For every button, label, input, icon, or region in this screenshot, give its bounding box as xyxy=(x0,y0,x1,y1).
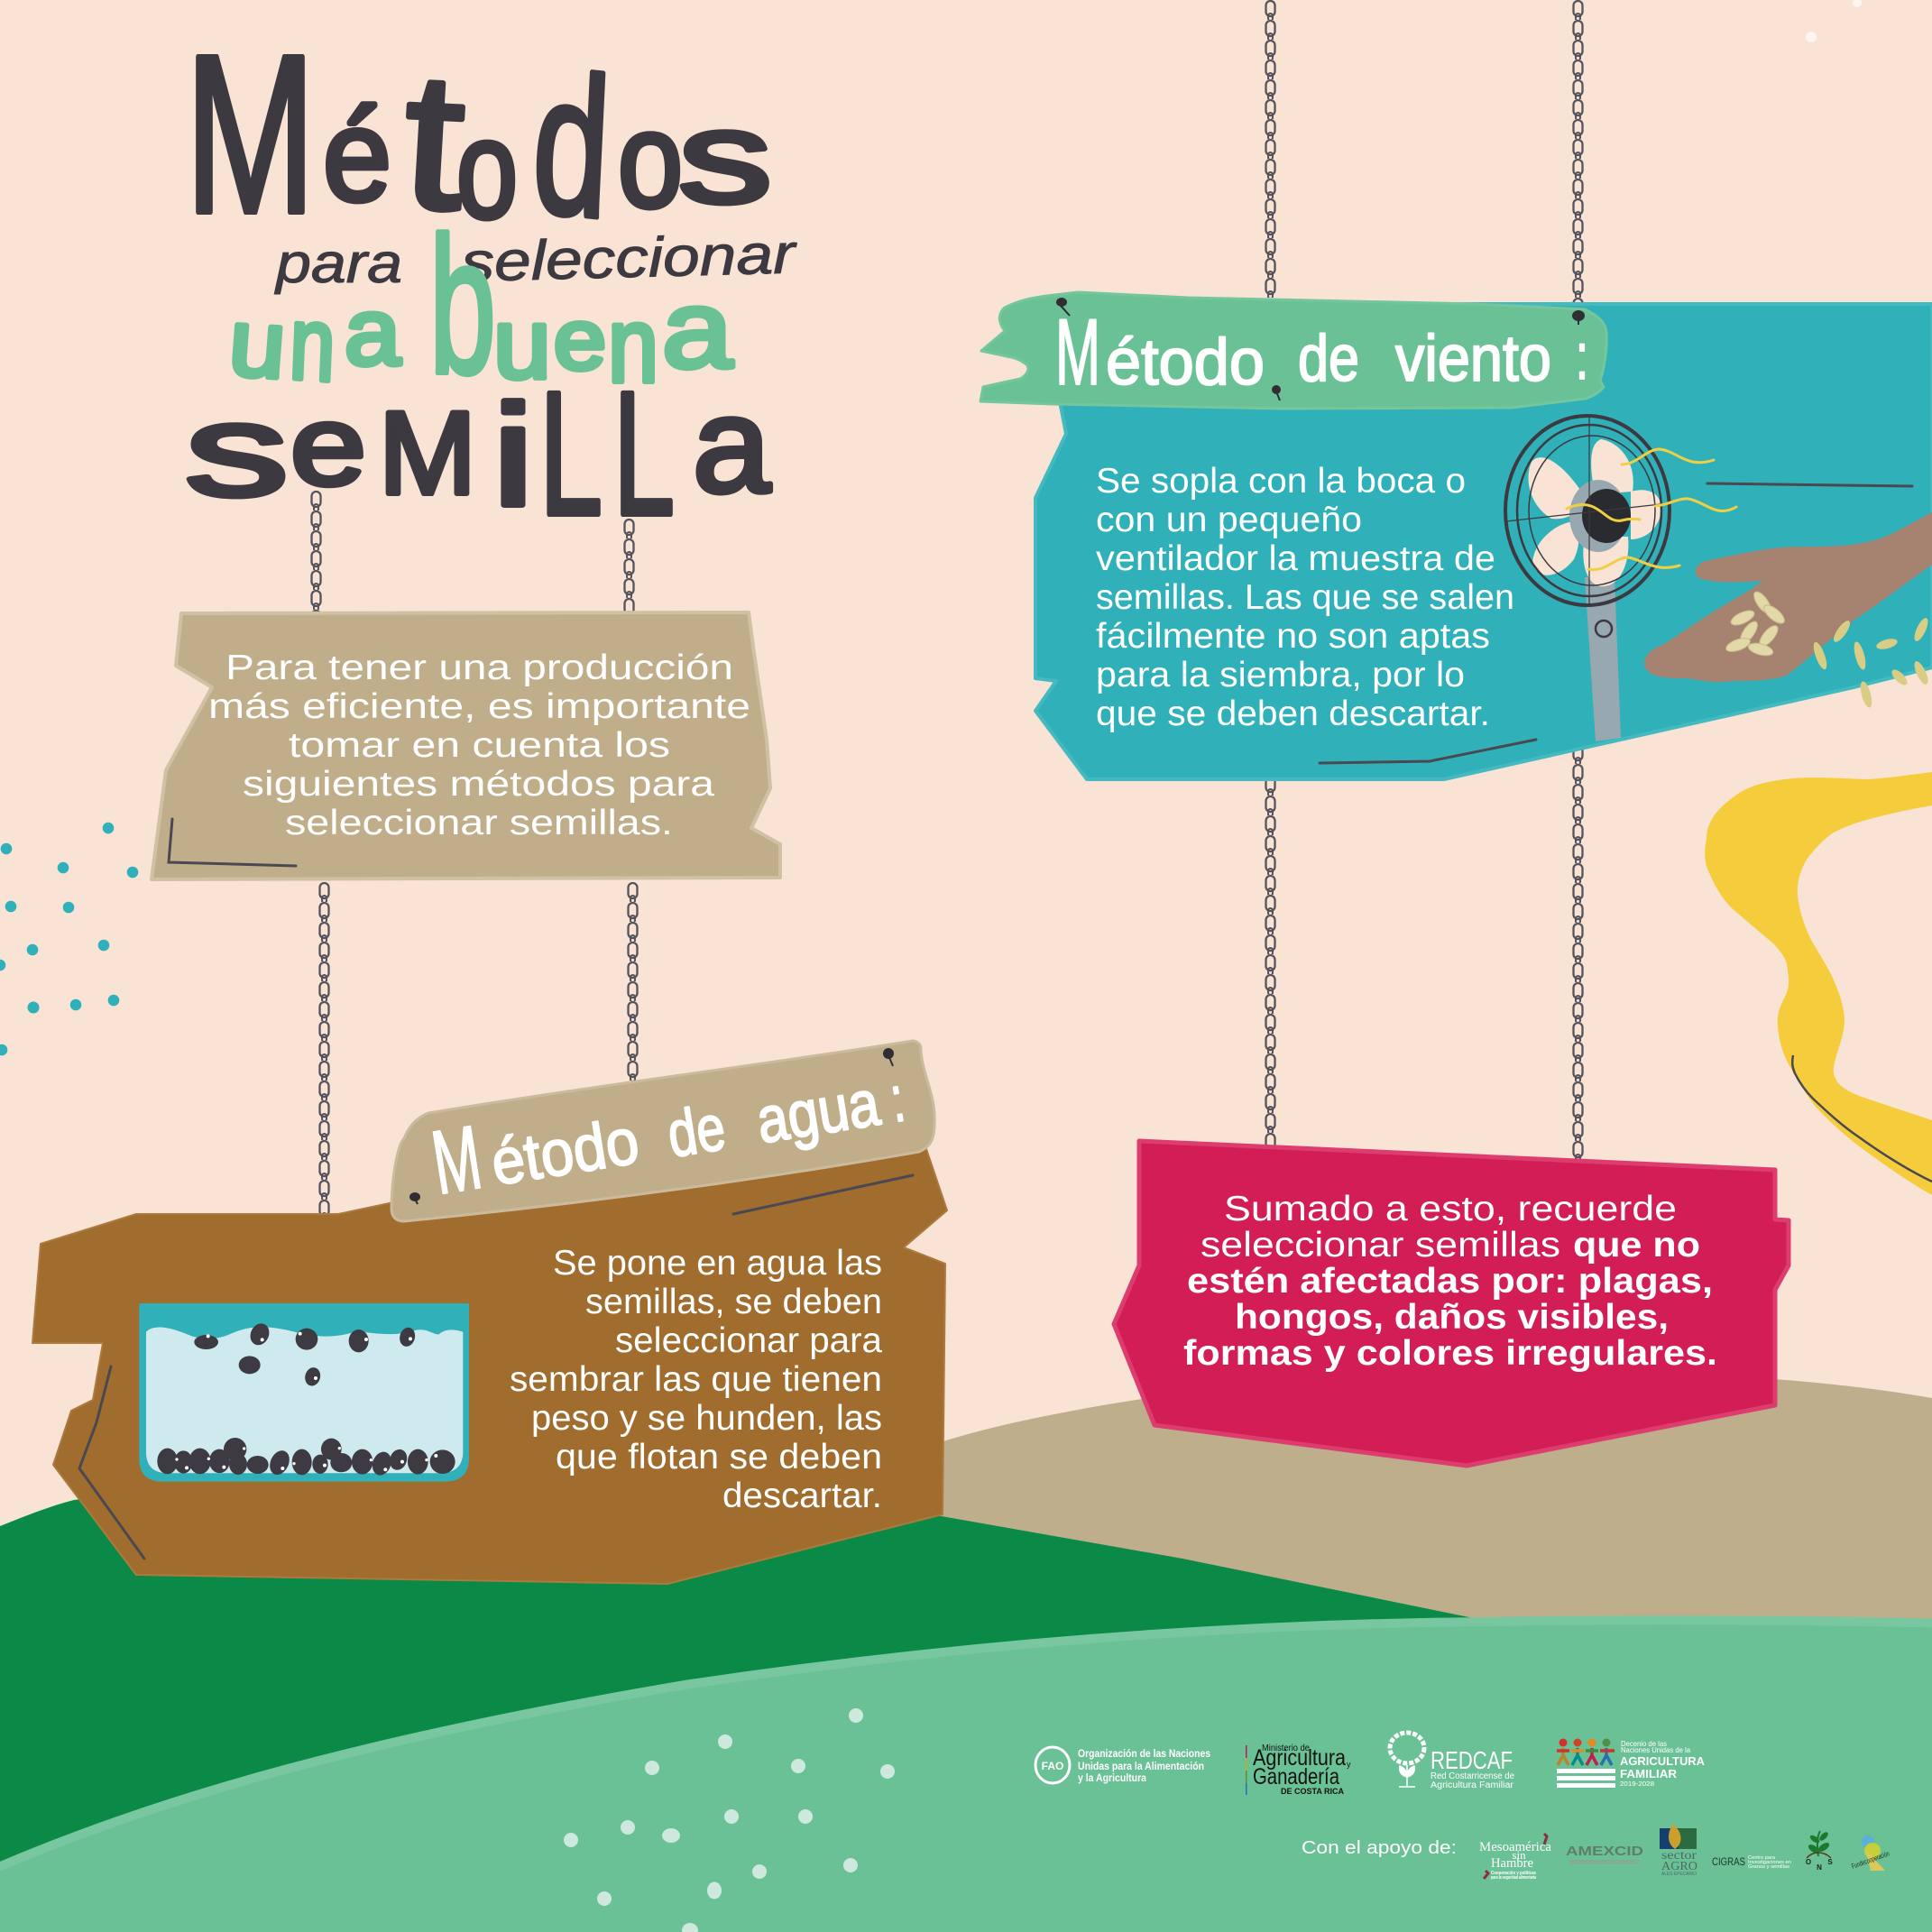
tan hill xyxy=(938,1371,1932,1669)
logo: FAO: y la Agricultura xyxy=(1078,1771,1146,1784)
logo: REDCAF xyxy=(1390,1733,1514,1790)
logo: Mesoamérica sin Hambre: Hambre xyxy=(1491,1856,1533,1871)
intro text: seleccionar semillas. xyxy=(285,804,673,842)
title line: semilla: s xyxy=(185,377,289,523)
water heading: de xyxy=(663,1091,731,1172)
intro text xyxy=(208,649,750,842)
water heading: : xyxy=(886,1063,909,1136)
logo: Decenio de la Agricultura Familiar: Naciones Unidas de la xyxy=(1621,1746,1691,1754)
logo: CIGRAS: Centro para xyxy=(1748,1855,1776,1861)
title line: buena: e xyxy=(554,292,606,388)
intro text: más eficiente, es importante xyxy=(208,687,750,726)
water body text xyxy=(510,1244,882,1515)
wind heading: étodo xyxy=(1106,327,1265,399)
wind body text: para la siembra, por lo xyxy=(1096,656,1465,695)
water body text: peso y se hunden, las xyxy=(531,1399,882,1438)
reminder text xyxy=(1183,1190,1717,1373)
icon: fan xyxy=(1505,416,1736,741)
logo: AMEXCID xyxy=(1566,1844,1643,1864)
wind heading board xyxy=(980,292,1606,409)
water heading: M xyxy=(426,1107,488,1214)
icon: nails on water heading xyxy=(409,1048,894,1204)
title line: Métodos: é xyxy=(323,82,391,228)
decorative teal dots xyxy=(0,823,138,1055)
wind heading: M xyxy=(1055,300,1100,405)
water body text: Se pone en agua las xyxy=(553,1244,882,1283)
logo: ONS xyxy=(1806,1831,1833,1872)
logo: ONS: O xyxy=(1806,1858,1811,1866)
logo: Decenio de la Agricultura Familiar xyxy=(1557,1739,1706,1788)
logo: Ministerio de Agricultura y Ganadería: Agricultura xyxy=(1253,1745,1346,1771)
logo: Decenio de la Agricultura Familiar: Decenio de las xyxy=(1621,1740,1667,1748)
wind body text: fácilmente no son aptas xyxy=(1096,617,1490,656)
support label: Con el apoyo de: xyxy=(1302,1838,1457,1858)
logo: CIGRAS: CIGRAS xyxy=(1712,1855,1745,1868)
logo: Ministerio de Agricultura y Ganadería: y xyxy=(1347,1760,1351,1769)
wind body text: Se sopla con la boca o xyxy=(1096,462,1466,501)
logo: FAO xyxy=(1035,1747,1210,1784)
water heading: agua xyxy=(752,1067,885,1157)
logo: Mesoamérica sin Hambre: para la seguridad alimentaria xyxy=(1491,1875,1536,1881)
water body text: semillas, se deben xyxy=(585,1283,882,1321)
reminder text: Sumado a esto, recuerde xyxy=(1224,1190,1677,1228)
panel: método de agua xyxy=(32,1040,947,1584)
title line: Métodos: d xyxy=(528,31,619,258)
water heading: étodo xyxy=(486,1105,644,1200)
wind body text: semillas. Las que se salen xyxy=(1096,578,1514,617)
reminder text: estén afectadas por: plagas, xyxy=(1187,1262,1713,1301)
logo: Mesoamérica sin Hambre: Cooperación y políticas xyxy=(1491,1871,1536,1876)
wind body text xyxy=(1096,462,1514,733)
logo: sector AGRO: AGRO xyxy=(1661,1860,1697,1873)
intro text: tomar en cuenta los xyxy=(289,726,670,765)
wind body text: ventilador la muestra de xyxy=(1096,539,1495,578)
wind heading: viento xyxy=(1395,323,1551,395)
title line: buena: u xyxy=(493,289,551,400)
logo: Decenio de la Agricultura Familiar: AGRICULTURA xyxy=(1620,1754,1706,1768)
panel: recordatorio xyxy=(1114,1141,1789,1466)
water heading board xyxy=(391,1041,934,1221)
wind body text: que se deben descartar. xyxy=(1096,695,1490,733)
intro board xyxy=(152,612,780,879)
red board xyxy=(1114,1141,1789,1466)
title line: seleccionar: seleccionar xyxy=(461,223,798,294)
title line: Métodos: s xyxy=(678,84,772,230)
intro text: siguientes métodos para xyxy=(243,765,714,804)
logo: Fundecooperación: Fundecooperación xyxy=(1851,1849,1891,1871)
logo: FAO: Organización de las Naciones xyxy=(1078,1747,1210,1760)
icon: hand with seeds xyxy=(1644,512,1932,709)
water body text: descartar. xyxy=(722,1477,882,1515)
title line: Métodos: o xyxy=(456,91,518,247)
logo: Mesoamérica sin Hambre: sin xyxy=(1512,1848,1526,1862)
dark green hill xyxy=(0,1479,1491,1932)
logo: Fundecooperación xyxy=(1851,1835,1891,1871)
logo: Ministerio de Agricultura y Ganadería: Ministerio de xyxy=(1262,1743,1310,1753)
water board xyxy=(32,1146,947,1584)
panel: intro xyxy=(152,612,780,879)
reminder text: hongos, daños visibles, xyxy=(1235,1298,1669,1337)
logo: sector AGRO xyxy=(1660,1824,1697,1877)
logo: CIGRAS: Granos y semillas xyxy=(1748,1864,1789,1870)
logo: CIGRAS: Investigaciones en xyxy=(1748,1860,1791,1865)
title line: semilla: L xyxy=(539,355,603,552)
title line: buena: b xyxy=(429,197,496,414)
reminder text: que no xyxy=(1573,1226,1700,1265)
decorative white dots top right xyxy=(1806,0,1862,42)
logo: Decenio de la Agricultura Familiar: FAMILIAR xyxy=(1620,1767,1678,1780)
logo: Ministerio de Agricultura y Ganadería: DE COSTA RICA xyxy=(1281,1787,1344,1796)
logo: FAO: FAO xyxy=(1042,1760,1063,1772)
intro text: Para tener una producción xyxy=(225,649,733,687)
logo: sector AGRO: ALES EPECARIO xyxy=(1661,1872,1697,1877)
reminder text: formas y colores irregulares. xyxy=(1183,1334,1717,1373)
title line: semilla: L xyxy=(613,355,675,552)
white dots on hill xyxy=(564,1708,895,1932)
title line: Métodos: t xyxy=(399,31,469,251)
logo: REDCAF: Red Costarricense de xyxy=(1431,1771,1514,1781)
logo: AMEXCID: AMEXCID xyxy=(1566,1844,1643,1859)
logo: CIGRAS xyxy=(1712,1855,1791,1870)
title line: Métodos: M xyxy=(185,8,316,260)
light green hill xyxy=(0,1620,1932,1932)
title line: buena: n xyxy=(608,286,658,405)
water body text: que flotan se deben xyxy=(556,1438,882,1477)
logo: ONS: N xyxy=(1817,1863,1822,1872)
chains xyxy=(309,0,1585,1216)
wind heading: : xyxy=(1576,321,1588,393)
wind body text: con un pequeño xyxy=(1096,501,1362,539)
title line: buena: a xyxy=(662,268,732,391)
logo: REDCAF: REDCAF xyxy=(1431,1746,1513,1774)
logo: FAO: Unidas para la Alimentación xyxy=(1078,1760,1204,1772)
title line: semilla: M xyxy=(379,387,476,519)
title line: para: para xyxy=(274,233,402,295)
logo: Decenio de la Agricultura Familiar: 2019-2028 xyxy=(1620,1781,1654,1788)
water body text: seleccionar para xyxy=(615,1321,882,1360)
logo: Ministerio de Agricultura y Ganadería: Ganadería xyxy=(1253,1764,1339,1789)
title xyxy=(185,8,798,552)
panel: método de viento xyxy=(980,292,1932,779)
title line: Métodos: o xyxy=(618,84,683,235)
reminder text: seleccionar semillas xyxy=(1201,1226,1560,1265)
logo: sector AGRO: sector xyxy=(1661,1849,1697,1863)
logo: Mesoamérica sin Hambre: Mesoamérica xyxy=(1479,1840,1551,1854)
water body text: sembrar las que tienen xyxy=(510,1360,882,1399)
logo: REDCAF: Agricultura Familiar xyxy=(1431,1780,1514,1790)
wind board xyxy=(1035,304,1932,779)
title line: una: a xyxy=(345,280,401,385)
wind heading: de xyxy=(1298,323,1359,395)
title line: semilla: i xyxy=(492,374,535,536)
icon: nails xyxy=(1056,298,1585,400)
logo: Mesoamérica sin Hambre xyxy=(1479,1834,1551,1881)
logo: Ministerio de Agricultura y Ganadería xyxy=(1246,1743,1351,1796)
title line: una: n xyxy=(288,285,338,403)
title line: una: u xyxy=(225,290,289,399)
illustration: beans in water xyxy=(139,1303,469,1482)
title line: semilla: e xyxy=(290,383,366,509)
logo: ONS: S xyxy=(1827,1858,1833,1866)
title line: semilla: a xyxy=(693,369,771,520)
yellow ribbon xyxy=(1705,772,1932,1195)
